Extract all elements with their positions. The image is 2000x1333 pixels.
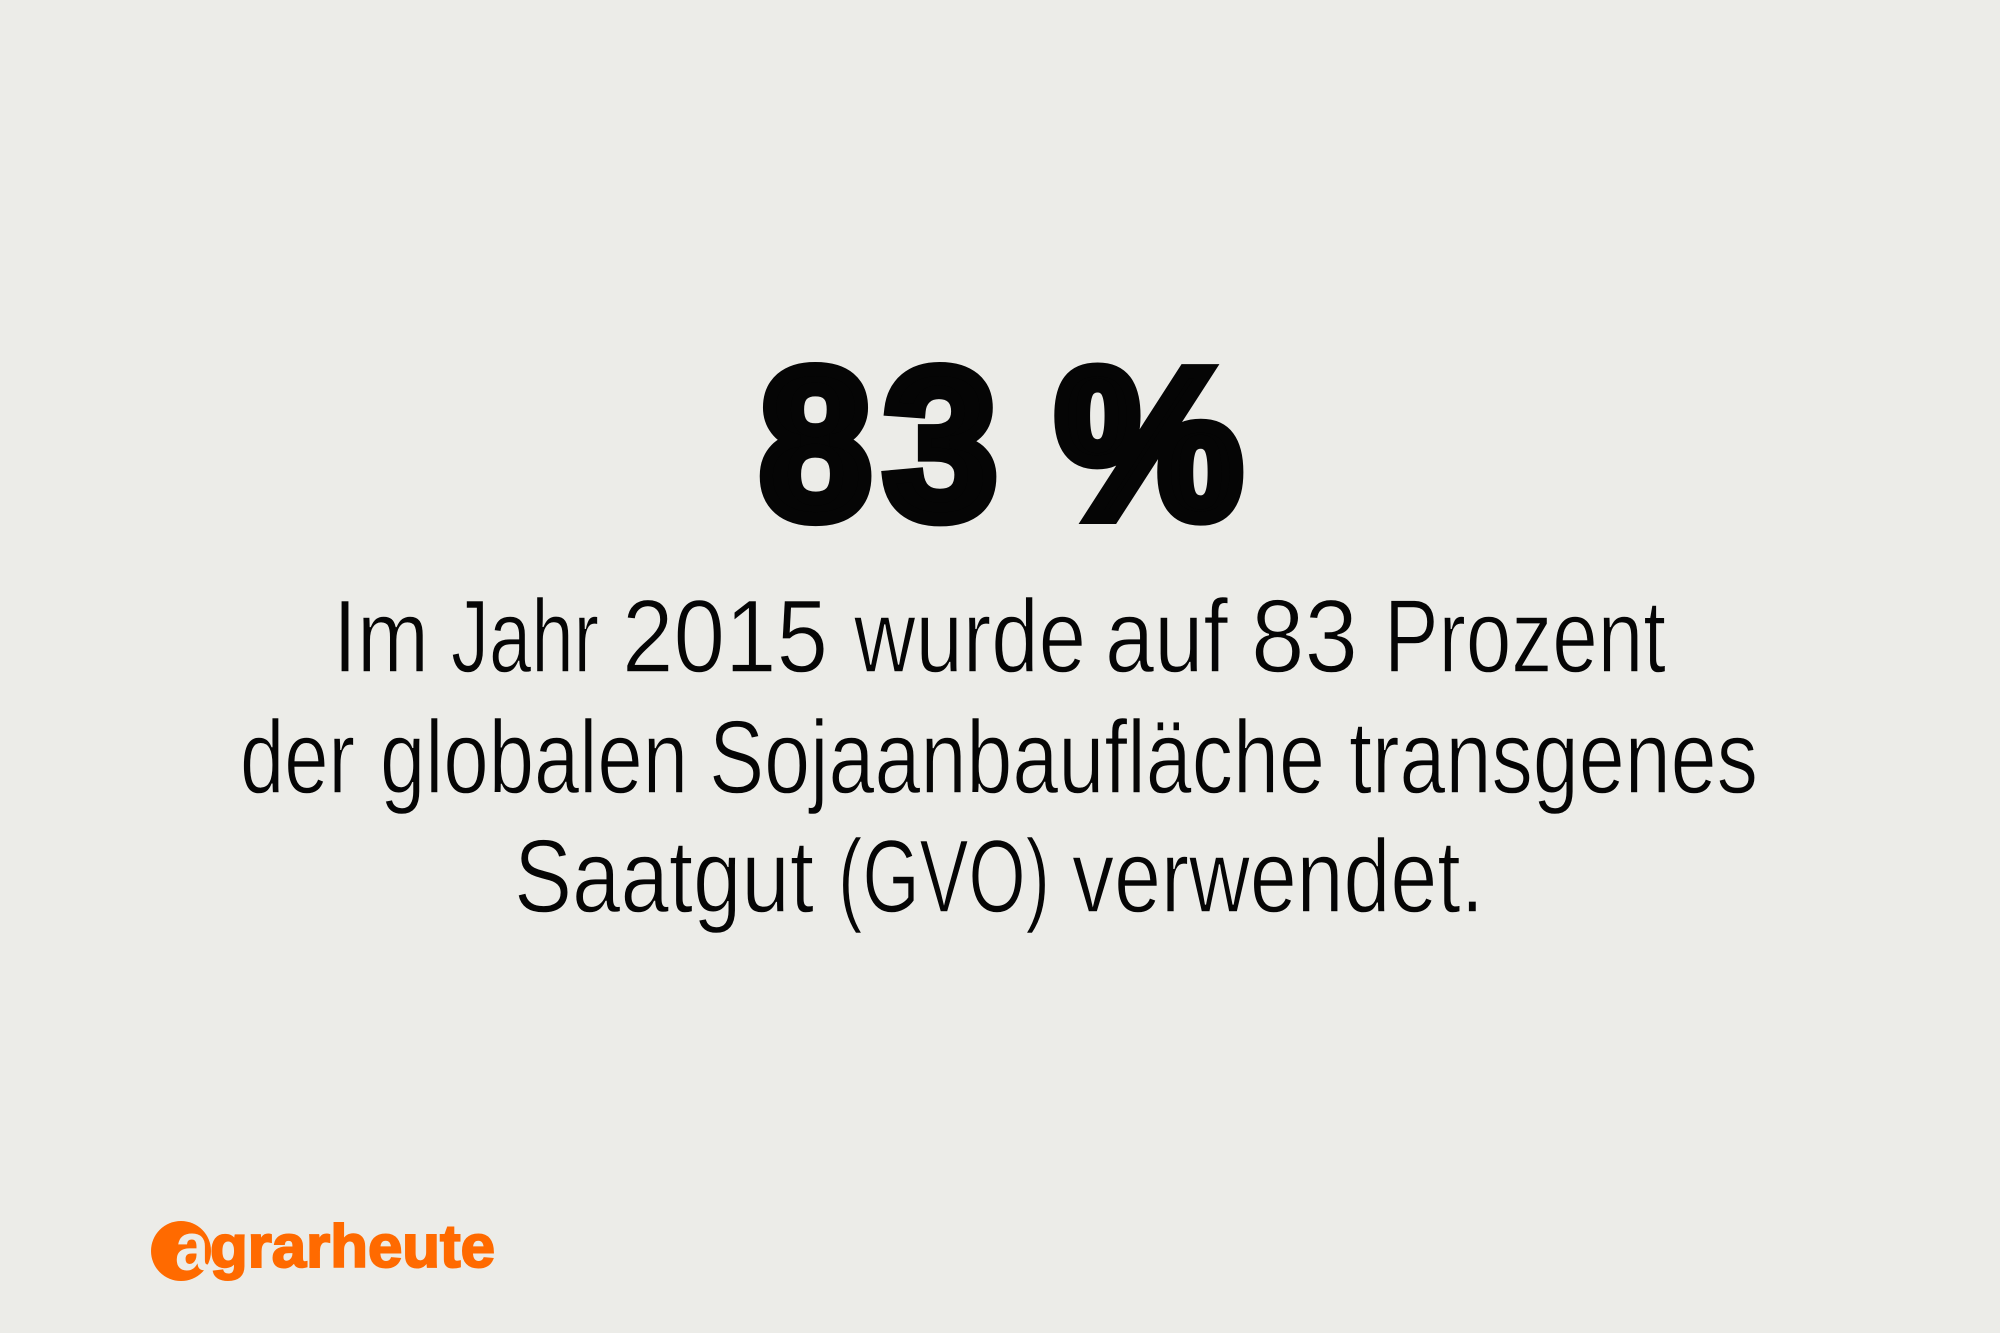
line 1: Im: [333, 579, 429, 695]
line 1: auf: [1105, 579, 1229, 695]
line 2: Sojaanbaufläche: [709, 700, 1325, 816]
line 2: der: [240, 700, 355, 816]
line 1: wurde: [853, 579, 1086, 695]
logo: agrarheute: [151, 1209, 495, 1285]
line 1: 83: [1251, 579, 1358, 695]
line 1: 2015: [622, 579, 828, 695]
line 1: Prozent: [1384, 579, 1666, 695]
line 2: transgenes: [1349, 700, 1758, 816]
line 1: Jahr: [451, 579, 599, 695]
line 3: (GVO): [838, 819, 1050, 935]
line 2: [240, 700, 1758, 816]
headline: 83 %: [760, 325, 1242, 562]
headline: 83 %: 8: [760, 325, 871, 562]
body text: [240, 579, 1758, 935]
logo letter a: a: [175, 1209, 210, 1285]
line 2: globalen: [380, 700, 688, 816]
line 3: verwendet.: [1072, 819, 1484, 935]
logo circle: [151, 1221, 211, 1281]
logo wordmark: grarheute: [210, 1213, 495, 1280]
line 1: [333, 579, 1666, 695]
line 3: [514, 819, 1484, 935]
headline: 83 %: 3: [884, 325, 997, 562]
line 3: Saatgut: [514, 819, 814, 935]
headline: 83 %: %: [1056, 325, 1242, 562]
